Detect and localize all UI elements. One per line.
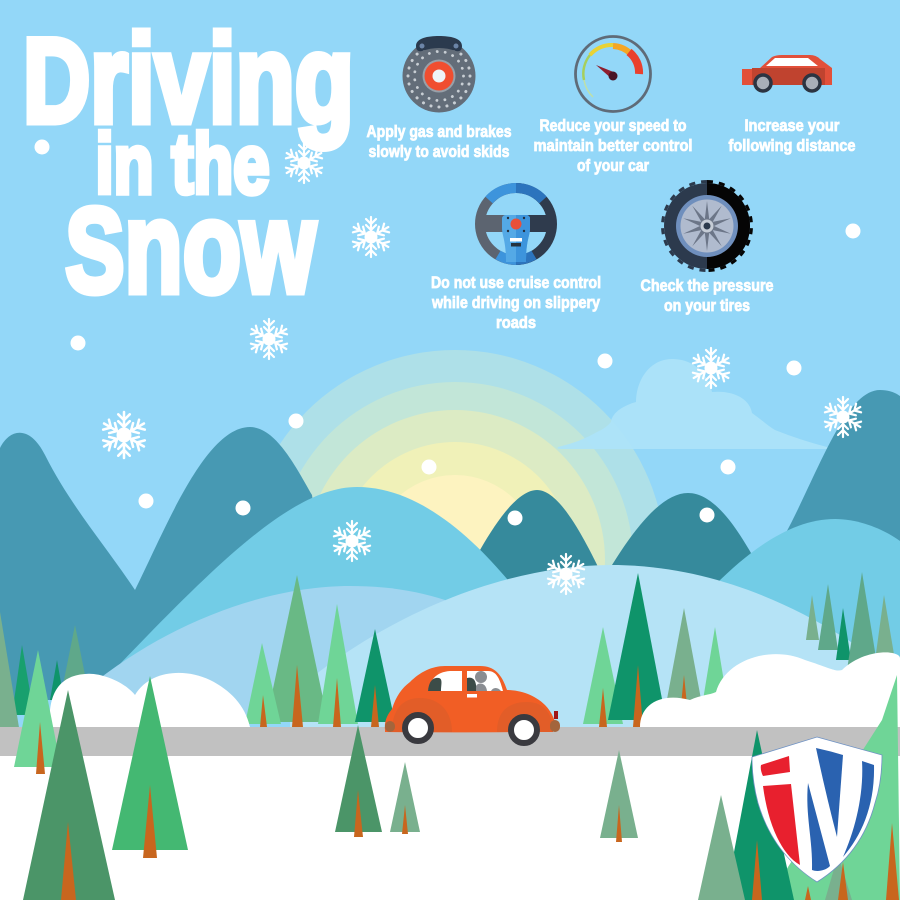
text: cruise control: while driving on slippery	[431, 293, 600, 312]
text: tire pressure: Check the pressure	[640, 276, 774, 295]
front tree left light	[14, 650, 61, 774]
orange car	[385, 666, 560, 743]
icon: brake disc	[402, 36, 476, 112]
snowflakes	[101, 143, 863, 594]
roadside tree	[335, 725, 382, 837]
far trees left	[0, 612, 88, 770]
logo shield	[752, 737, 882, 882]
tree cluster left of car	[245, 575, 395, 727]
front light hill	[290, 565, 900, 730]
pale blue hill	[85, 586, 500, 720]
icon: tire	[662, 182, 752, 270]
back mountains	[0, 390, 900, 700]
text: increase following distance	[728, 116, 856, 155]
dark teal mountains	[480, 490, 755, 650]
text: reduce your speed: Reduce your speed to	[540, 116, 686, 135]
text: increase following distance: following distance	[728, 136, 856, 155]
snow banks	[0, 652, 900, 900]
sun with concentric rings	[245, 350, 665, 770]
text: reduce your speed: maintain better control	[534, 136, 692, 155]
front tree large dark	[23, 690, 115, 900]
text: apply gas and brakes: slowly to avoid skids	[368, 142, 510, 161]
mid blue hills	[95, 487, 900, 690]
text: increase following distance: Increase your	[744, 116, 840, 135]
far trees right	[806, 572, 900, 690]
text: reduce your speed	[534, 116, 692, 175]
icon: speedometer	[576, 36, 650, 112]
cloud	[558, 359, 828, 449]
text: apply gas and brakes	[366, 122, 512, 161]
front tree large green	[112, 676, 188, 858]
text: cruise control: roads	[496, 313, 536, 332]
icon: steering wheel	[480, 188, 552, 262]
bottom right trees	[698, 675, 900, 900]
title: Snow	[66, 174, 316, 320]
tree cluster right of car	[583, 573, 727, 727]
title: in the	[96, 117, 270, 211]
snow dots	[34, 140, 860, 526]
text: cruise control	[431, 273, 601, 332]
text: tire pressure	[640, 276, 774, 315]
text: apply gas and brakes: Apply gas and brakes	[366, 122, 512, 141]
roadside small tree	[390, 762, 420, 834]
roadside tree right	[600, 750, 638, 842]
road	[0, 727, 900, 756]
title	[23, 10, 354, 320]
icon: red car	[742, 55, 832, 91]
text: tire pressure: on your tires	[664, 296, 750, 315]
title: Driving	[23, 10, 354, 149]
text: cruise control: Do not use cruise control	[431, 273, 601, 292]
text: reduce your speed: of your car	[577, 156, 649, 175]
